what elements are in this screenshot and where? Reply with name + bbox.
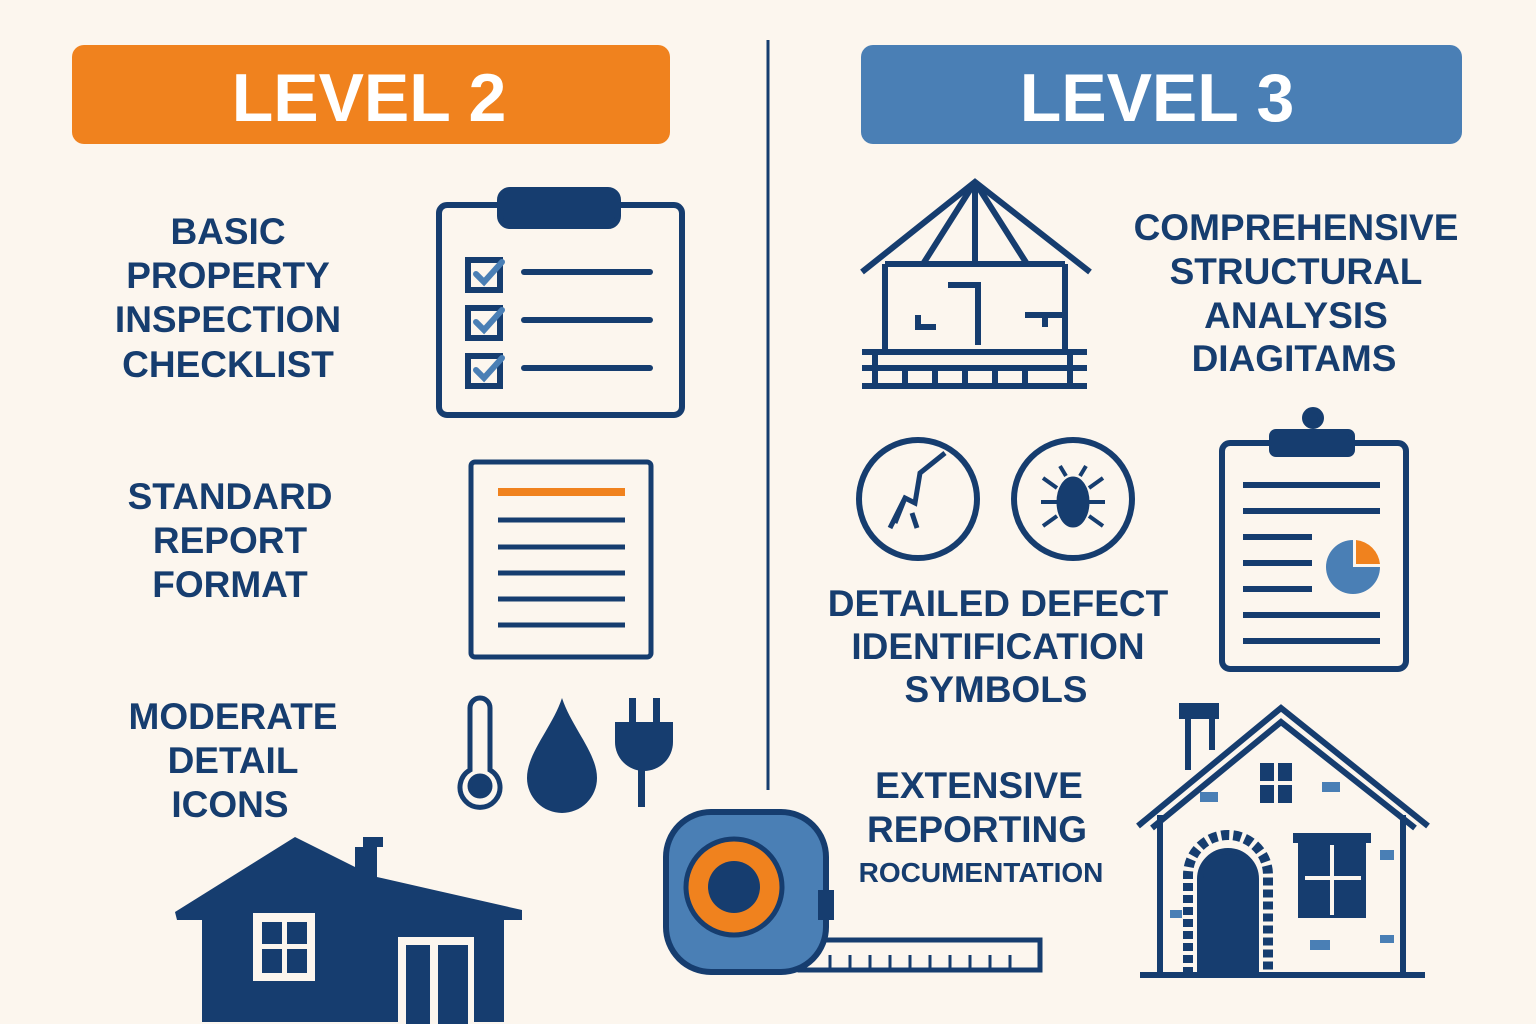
text: comprehensive structural analysis: COMPREHENSIVE [1134,207,1458,248]
text: standard report format: REPORT [153,520,307,561]
icon: filled house [175,837,522,1024]
text: standard report format: FORMAT [152,564,308,605]
icon: report clipboard with chart [1222,410,1406,669]
icon: thermometer [460,698,500,807]
text: basic property inspection checklist [115,211,341,385]
text: moderate detail icons: MODERATE [129,696,337,737]
icon: structural house diagram [862,182,1090,388]
text: comprehensive structural analysis: ANALYSIS [1204,295,1388,336]
text: basic property inspection checklist: CHECKLIST [122,344,334,385]
text: comprehensive structural analysis [1134,207,1458,379]
text: standard report format: STANDARD [128,476,332,517]
icon: water drop [527,698,597,813]
text: comprehensive structural analysis: DIAGITAMS [1192,338,1396,379]
text: basic property inspection checklist: PROPERTY [126,255,330,296]
divider [766,40,770,790]
text: extensive reporting documentation [859,765,1103,888]
header: level 3 [861,45,1462,144]
text: moderate detail icons [129,696,337,825]
text: detailed defect identification symbols: IDENTIFICATION [851,626,1145,667]
text: detailed defect identification symbols: DETAILED DEFECT [828,583,1169,624]
icon: tape measure [666,812,1040,972]
text: detailed defect identification symbols: SYMBOLS [905,669,1087,710]
text: moderate detail icons: ICONS [171,784,289,825]
text: basic property inspection checklist: INSPECTION [115,299,341,340]
text: extensive reporting documentation: REPORTING [867,809,1087,850]
icon: report document [471,462,651,657]
icon: checklist clipboard [439,190,682,415]
text: basic property inspection checklist: BASIC [170,211,286,252]
text: detailed defect identification symbols [828,583,1169,710]
text: standard report format [128,476,332,605]
icon: plug [615,698,673,807]
text: moderate detail icons: DETAIL [168,740,298,781]
icon: brick house [1138,706,1428,975]
icon: crack circle [859,440,977,558]
header: level 2 [72,45,670,144]
header: level 3: LEVEL 3 [1020,60,1294,136]
header: level 2: LEVEL 2 [232,60,506,136]
text: extensive reporting documentation: EXTENSIVE [875,765,1083,806]
text: comprehensive structural analysis: STRUCTURAL [1170,251,1422,292]
text: extensive reporting documentation: ROCUMENTATION [859,857,1103,888]
icon: bug circle [1014,440,1132,558]
